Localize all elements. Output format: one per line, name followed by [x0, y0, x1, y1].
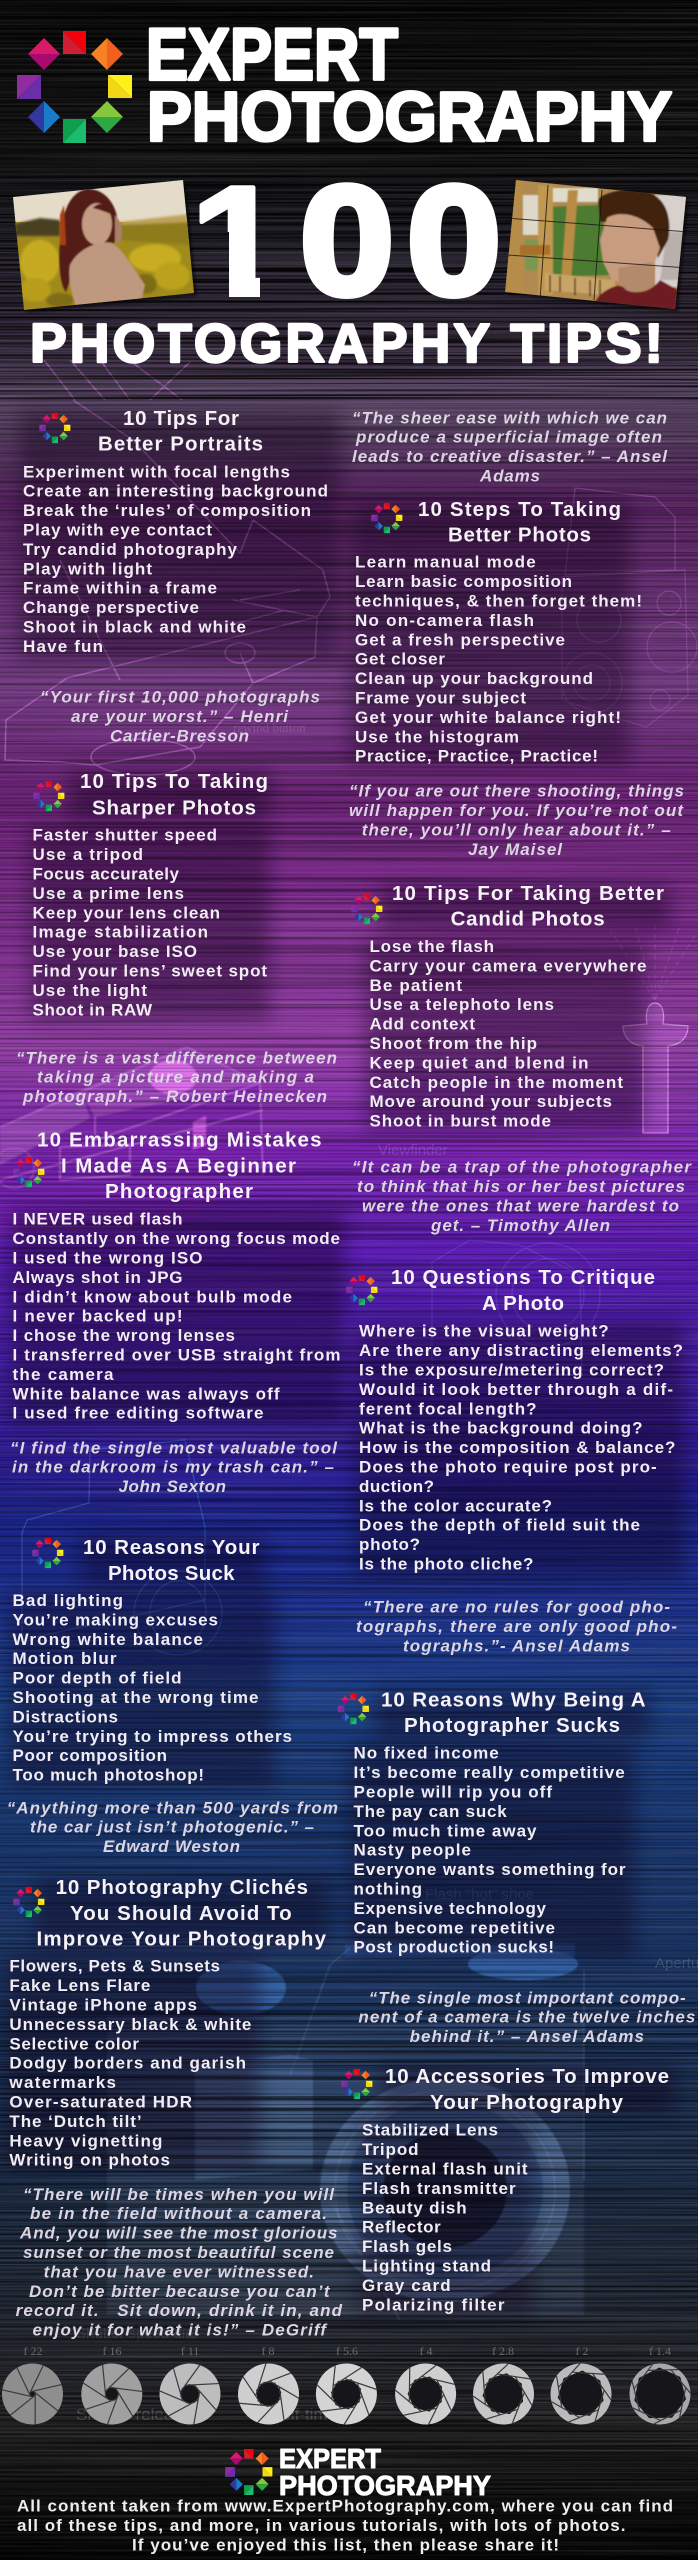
quote: DeGriff: sunset or the most beautiful scene [23, 2243, 334, 2262]
heading: Better Photos [448, 524, 591, 547]
tip list: I used the wrong ISO [12, 1248, 202, 1268]
tip list: watermarks [8, 2073, 116, 2092]
tip list: Would it look better through a dif- [359, 1380, 673, 1399]
tip list: The pay can suck [354, 1802, 507, 1821]
wordmark: EXPERT [146, 14, 398, 96]
heading: 10 Steps To Taking [418, 498, 621, 521]
tip list: Use your base ISO [32, 942, 197, 961]
tip list: nothing [354, 1880, 422, 1898]
tip list: Find your lens’ sweet spot [32, 962, 267, 980]
heading: You Should Avoid To [70, 1902, 292, 1925]
tip list: Use the histogram [355, 727, 519, 746]
footer text: If you’ve enjoyed this list, then please share it! [132, 2536, 559, 2555]
tip list: Focus accurately [32, 864, 180, 884]
quote: Ansel Adams, creative disaster: leads to creative disaster.” – Ansel [352, 447, 668, 466]
heading: Better Portraits [98, 433, 263, 456]
panel: 10 accessories [341, 2065, 669, 2314]
aperture f 2 [539, 2344, 623, 2436]
tip list: Get a fresh perspective [355, 630, 565, 649]
faint labels from the camera diagrams: Film rewind [372, 1068, 449, 1085]
faint labels from the camera diagrams: Shutter speed dial [76, 2325, 197, 2342]
icon: logo wheel [13, 1157, 44, 1187]
tip list: duction? [359, 1477, 434, 1496]
icon: logo wheel [338, 1694, 369, 1724]
heading [83, 1536, 260, 1585]
tip list: Poor composition [12, 1746, 167, 1765]
quote: Ansel Adams, twelve inches: behind it.” – Ansel Adams [410, 2027, 644, 2046]
heading: 10 Tips To Taking [80, 770, 268, 793]
tip list: Writing on photos [9, 2151, 170, 2170]
quote: DeGriff: that you have ever witnessed. [44, 2262, 314, 2281]
tip list: Learn manual mode [355, 553, 536, 572]
tip list: Heavy vignetting [9, 2131, 162, 2150]
line art: flash head figure [610, 925, 695, 1133]
tip list: Poor depth of field [12, 1669, 182, 1688]
quote: DeGriff: And, you will see the most glorious [19, 2224, 338, 2243]
tip list: Distractions [12, 1707, 118, 1726]
heading: Sharper Photos [92, 796, 256, 820]
heading: Photos Suck [108, 1562, 235, 1585]
aperture f 22 [2, 2344, 63, 2424]
tip list: Expensive technology [354, 1899, 547, 1918]
line art: blue camera outline [22, 1440, 222, 1655]
aperture f 1.4 [617, 2344, 698, 2437]
quote: Jay Maisel [349, 782, 684, 859]
quote: Robert Heinecken: photograph.” – Robert Heinecken [22, 1087, 327, 1106]
tip list: Reflector [362, 2218, 441, 2237]
tip list: Bad lighting [12, 1591, 123, 1610]
tip list: Unnecessary black & white [9, 2015, 251, 2034]
tip list [32, 826, 267, 1019]
tip list: Get closer [355, 650, 445, 669]
tip list: Use a prime lens [32, 884, 184, 903]
footer text [17, 2497, 673, 2555]
tip list: Move around your subjects [370, 1092, 612, 1111]
tip list: Get your white balance right! [355, 708, 621, 727]
tip list: Be patient [370, 976, 462, 995]
quote: Jay Maisel: will happen for you. If you’re not out [349, 801, 684, 820]
tip list: Shoot from the hip [370, 1034, 537, 1053]
tip list: Break the ‘rules’ of composition [23, 501, 311, 520]
heading: 10 Tips For [123, 407, 239, 430]
tip list [12, 1210, 340, 1423]
line art: bright purple camera [0, 1047, 263, 1235]
tip list: People will rip you off [354, 1782, 552, 1802]
faint labels from the camera diagrams: Self-timer [270, 2405, 343, 2424]
tip list: Nasty people [354, 1841, 471, 1860]
quote: Cartier-Bresson: “Your first 10,000 photographs [40, 688, 320, 707]
tip list: photo? [359, 1535, 420, 1554]
tip list: Flowers, Pets & Sunsets [9, 1957, 220, 1976]
heading [36, 1876, 327, 1951]
aperture f 8 [234, 2344, 303, 2428]
panel: 10 tips for taking better candid photos [351, 882, 664, 1131]
faint labels from the camera diagrams: rewind button [233, 720, 306, 735]
faint labels from the camera diagrams: Flash "hot" shoe [425, 1886, 534, 1903]
quote: Edward Weston [7, 1798, 338, 1856]
tip list: Try candid photography [23, 540, 238, 559]
quote: John Sexton: John Sexton [118, 1477, 226, 1496]
icon: logo wheel [346, 1275, 377, 1305]
tip list: I used free editing software [12, 1404, 264, 1423]
quote: DeGriff: Don’t be bitter because you can’t [29, 2282, 331, 2301]
quote: Ansel Adams, creative disaster: produce a superficial image often [355, 428, 662, 447]
quote: Ansel Adams, no rules: tographs, there are only good pho- [356, 1617, 677, 1636]
tip list: White balance was always off [12, 1384, 280, 1403]
tip list: Gray card [362, 2276, 451, 2295]
heading: 10 Reasons Your [83, 1536, 260, 1559]
aperture f 2.8 [462, 2344, 545, 2436]
quote: John Sexton [10, 1438, 338, 1496]
big number 100: 0 [300, 154, 394, 327]
tip list: How is the composition & balance? [359, 1438, 675, 1457]
aperture f 5.6 [307, 2344, 385, 2433]
tip list: Does the photo require post pro- [359, 1458, 657, 1476]
tip list: Learn basic composition [355, 572, 572, 591]
panel: 10 questions to critique a photo [346, 1266, 683, 1574]
tip list: ferent focal length? [359, 1399, 536, 1418]
heading [385, 2065, 669, 2114]
tip list: Create an interesting background [23, 482, 328, 501]
heading: 10 Reasons Why Being A [381, 1689, 646, 1712]
heading: Photographer [105, 1180, 253, 1203]
tip list: You’re trying to impress others [12, 1727, 292, 1746]
tip list: the camera [12, 1365, 114, 1384]
quote: DeGriff: record it. Sit down, drink it in, and [16, 2301, 343, 2320]
aperture f 1.4: f 1.4 [649, 2344, 671, 2358]
aperture f 2.8: f 2.8 [492, 2344, 514, 2358]
title: photography tips: PHOTOGRAPHY TIPS! [30, 312, 663, 374]
quote: Timothy Allen: to think that his or her best pictures [357, 1177, 685, 1196]
quote: DeGriff [16, 2185, 343, 2340]
tip list: Keep quiet and blend in [370, 1053, 588, 1072]
quote: John Sexton: “I find the single most valuable tool [10, 1438, 338, 1457]
aperture f 22: f 22 [24, 2344, 42, 2358]
aperture f 2: f 2 [576, 2344, 588, 2358]
quote: DeGriff: be in the field without a camera. [30, 2204, 327, 2223]
icon: logo wheel [351, 894, 382, 924]
tip list: Have fun [23, 637, 103, 656]
heading [392, 882, 664, 931]
panel: 10 reasons your photos suck [12, 1536, 292, 1785]
heading: 10 Tips For Taking Better [392, 882, 664, 905]
quote: Timothy Allen [352, 1158, 692, 1235]
footer text: All content taken from www.ExpertPhotography.com, where you can find [17, 2497, 673, 2516]
tip list: Add context [370, 1015, 475, 1034]
quote: DeGriff: enjoy it for what it is!” – DeGriff [32, 2321, 328, 2340]
tip list: Everyone wants something for [354, 1860, 626, 1879]
quote: Ansel Adams, twelve inches [358, 1988, 695, 2046]
aperture f 4: f 4 [420, 2344, 432, 2358]
tip list: I transferred over USB straight from [12, 1346, 340, 1364]
quote: Cartier-Bresson: are your worst.” – Henri [71, 707, 289, 726]
tip list: Over-saturated HDR [9, 2092, 192, 2112]
tip list: Change perspective [23, 598, 199, 617]
tip list: Flash transmitter [362, 2179, 516, 2198]
tip list: Practice, Practice, Practice! [355, 747, 598, 766]
tip list: Frame your subject [355, 688, 526, 708]
tip list: Is the photo cliche? [359, 1554, 533, 1574]
tip list: Shoot in RAW [32, 1000, 153, 1019]
heading [381, 1689, 646, 1737]
tip list: Polarizing filter [362, 2295, 505, 2314]
aperture f 11: f 11 [181, 2344, 199, 2358]
tip list: I never backed up! [12, 1307, 182, 1326]
quote: Robert Heinecken: “There is a vast difference between [16, 1048, 337, 1067]
tip list: techniques, & then forget them! [355, 592, 642, 610]
quote: Ansel Adams, no rules [356, 1598, 677, 1655]
tip list: Experiment with focal lengths [23, 462, 290, 481]
tip list: Does the depth of field suit the [359, 1516, 640, 1535]
tip list: Dodgy borders and garish [9, 2054, 246, 2073]
aperture f 16 [73, 2344, 151, 2433]
tip list [370, 937, 646, 1131]
tip list: Constantly on the wrong focus mode [12, 1229, 340, 1248]
panel: 10 tips to taking sharper photos [32, 770, 268, 1019]
tip list: Are there any distracting elements? [359, 1341, 683, 1360]
tip list: Play with eye contact [23, 520, 212, 540]
panel: 10 embarrassing mistakes [12, 1129, 340, 1423]
heading: 10 Questions To Critique [391, 1266, 655, 1289]
aperture f 5.6: f 5.6 [336, 2344, 358, 2358]
tip list: I NEVER used flash [12, 1210, 182, 1229]
icon: logo wheel [33, 781, 64, 811]
tip list: Is the color accurate? [359, 1496, 552, 1515]
photo: woman in yellow field [13, 180, 198, 314]
tip list: Too much time away [354, 1821, 537, 1840]
tip list: Always shot in JPG [12, 1268, 182, 1287]
photo: smiling man through window [505, 180, 689, 312]
quote: John Sexton: in the darkroom is my trash can.” – [12, 1458, 335, 1477]
icon: logo wheel [341, 2069, 372, 2099]
heading: 10 Photography Clichés [56, 1876, 308, 1899]
heading [80, 770, 268, 820]
big number 100: 1 [190, 154, 285, 330]
panel: 10 reasons why being a photographer sucks [338, 1689, 646, 1957]
line art: purple camera with lens [432, 1240, 600, 1375]
tip list: Flash gels [362, 2237, 452, 2256]
tip list: Selective color [9, 2034, 139, 2053]
tip list: Shoot in burst mode [370, 1112, 551, 1131]
line art: twin lens reflex camera [562, 488, 697, 727]
aperture f 4 [385, 2344, 466, 2435]
tip list [12, 1591, 292, 1785]
heading: Improve Your Photography [36, 1928, 327, 1951]
tip list: Too much photoshop! [12, 1766, 204, 1785]
tip list: Post production sucks! [354, 1938, 554, 1957]
footer logo: EXPERT [279, 2443, 381, 2474]
quote: Jay Maisel: Jay Maisel [468, 840, 563, 859]
tip list [362, 2121, 528, 2314]
footer logo [225, 2443, 491, 2501]
heading: A Photo [482, 1292, 564, 1315]
heading [98, 407, 263, 456]
footer logo: PHOTOGRAPHY [279, 2470, 491, 2501]
aperture f 11 [155, 2344, 225, 2429]
tip list: No on-camera flash [355, 611, 534, 630]
tip list: Motion blur [12, 1649, 117, 1668]
wordmark: PHOTOGRAPHY [147, 78, 672, 156]
quote: DeGriff: “There will be times when you will [23, 2185, 335, 2204]
dark glow behind text blocks [5, 410, 685, 2315]
quote: Robert Heinecken [16, 1048, 337, 1106]
tip list: Carry your camera everywhere [370, 956, 646, 975]
tip list: Shoot in black and white [23, 618, 246, 636]
tip list [8, 1957, 251, 2170]
quote: Ansel Adams, twelve inches: nent of a camera is the twelve inches [358, 2008, 695, 2027]
tip list: I chose the wrong lenses [12, 1326, 235, 1345]
tip list: Stabilized Lens [362, 2121, 498, 2140]
tip list: Lighting stand [362, 2256, 491, 2276]
quote: Cartier-Bresson: Cartier-Bresson [110, 726, 249, 746]
tip list: Shooting at the wrong time [12, 1688, 258, 1707]
tip list: Where is the visual weight? [359, 1322, 609, 1341]
tip list [359, 1322, 683, 1574]
quote: Ansel Adams, no rules: “There are no rules for good pho- [363, 1598, 670, 1617]
tip list: Clean up your background [355, 669, 593, 688]
tip list: What is the background doing? [359, 1419, 642, 1438]
big number 100 [200, 182, 498, 299]
quote: Edward Weston: Edward Weston [103, 1837, 240, 1856]
quote: Robert Heinecken: taking a picture and making a [37, 1068, 314, 1087]
tip list: It’s become really competitive [354, 1763, 625, 1782]
quote: Timothy Allen: get. – Timothy Allen [430, 1216, 610, 1235]
tip list: Use a tripod [32, 845, 143, 864]
aperture f 16: f 16 [102, 2344, 122, 2358]
tip list: Can become repetitive [354, 1918, 555, 1937]
quote: Ansel Adams, twelve inches: “The single most important compo- [369, 1988, 686, 2007]
heading: Photographer Sucks [404, 1714, 620, 1737]
quote: Edward Weston: the car just isn’t photogenic.” – [30, 1818, 315, 1837]
quote: Timothy Allen: were the ones that were hardest to [362, 1196, 679, 1215]
quote: Jay Maisel: “If you are out there shooting, things [349, 782, 684, 801]
tip list: The ‘Dutch tilt’ [9, 2112, 142, 2131]
tip list: You’re making excuses [12, 1610, 218, 1629]
tip list: Fake Lens Flare [9, 1976, 150, 1995]
tip list: External flash unit [362, 2160, 528, 2178]
quote: Ansel Adams, no rules: tographs.”- Ansel Adams [403, 1636, 630, 1655]
tip list: Play with light [23, 559, 152, 578]
tip list: Use a telephoto lens [370, 995, 554, 1014]
heading [418, 498, 621, 547]
icon: logo wheel [32, 1538, 63, 1568]
heading [391, 1266, 655, 1315]
tip list: Vintage iPhone apps [9, 1996, 197, 2014]
header logo [17, 31, 132, 143]
tip list: Catch people in the moment [370, 1073, 623, 1092]
quote: Ansel Adams, creative disaster [352, 408, 668, 485]
panel: 10 steps to taking better photos [355, 498, 642, 766]
tip list [354, 1744, 626, 1957]
aperture scale [2, 2344, 698, 2437]
tip list: Use the light [32, 981, 147, 1000]
tip list: Image stabilization [32, 923, 208, 942]
quote: Ansel Adams, creative disaster: Adams [479, 466, 540, 485]
tip list: Beauty dish [362, 2198, 467, 2217]
quote: Timothy Allen: “It can be a trap of the photographer [352, 1158, 692, 1177]
panel: 10 tips for better portraits [23, 407, 328, 656]
tip list [355, 553, 642, 766]
faint labels from the camera diagrams [76, 720, 698, 2424]
heading: Candid Photos [451, 908, 605, 931]
tip list: No fixed income [354, 1744, 499, 1763]
heading: I Made As A Beginner [61, 1154, 296, 1177]
footer text: all of these tips, and more, in various tutorials, with lots of photos. [17, 2516, 626, 2535]
quote: Jay Maisel: there, you’ll only hear about it.” – [362, 820, 671, 840]
tip list: Is the exposure/metering correct? [359, 1360, 664, 1380]
tip list: Frame within a frame [23, 579, 217, 598]
heading: Your Photography [430, 2091, 624, 2114]
line art: tilted camera behind first section [5, 360, 330, 775]
quote: Edward Weston: “Anything more than 500 yards from [7, 1798, 338, 1817]
aperture f 8: f 8 [262, 2344, 274, 2358]
heading: 10 Embarrassing Mistakes [37, 1129, 322, 1152]
tip list: Wrong white balance [12, 1630, 203, 1649]
tip list: Lose the flash [370, 937, 494, 956]
icon: logo wheel [13, 1887, 44, 1917]
big number 100: 0 [407, 154, 501, 327]
heading: 10 Accessories To Improve [385, 2065, 669, 2088]
tip list: I didn’t know about bulb mode [12, 1287, 292, 1306]
quote: Ansel Adams, creative disaster: “The sheer ease with which we can [352, 408, 667, 427]
tip list [23, 462, 328, 656]
icon: logo wheel [371, 503, 402, 533]
tip list: Faster shutter speed [32, 826, 217, 845]
big blue-grey camera [107, 1943, 584, 2320]
faint labels from the camera diagrams: Shutter release [76, 2405, 191, 2424]
quote: Cartier-Bresson [40, 688, 320, 746]
wordmark [146, 14, 672, 156]
panel: 10 photography cliches [8, 1876, 327, 2170]
heading [37, 1129, 322, 1203]
tip list: Keep your lens clean [32, 903, 220, 922]
tip list: Tripod [362, 2140, 418, 2159]
faint labels from the camera diagrams: Viewfinder [378, 1142, 448, 1159]
icon: logo wheel [39, 413, 70, 443]
